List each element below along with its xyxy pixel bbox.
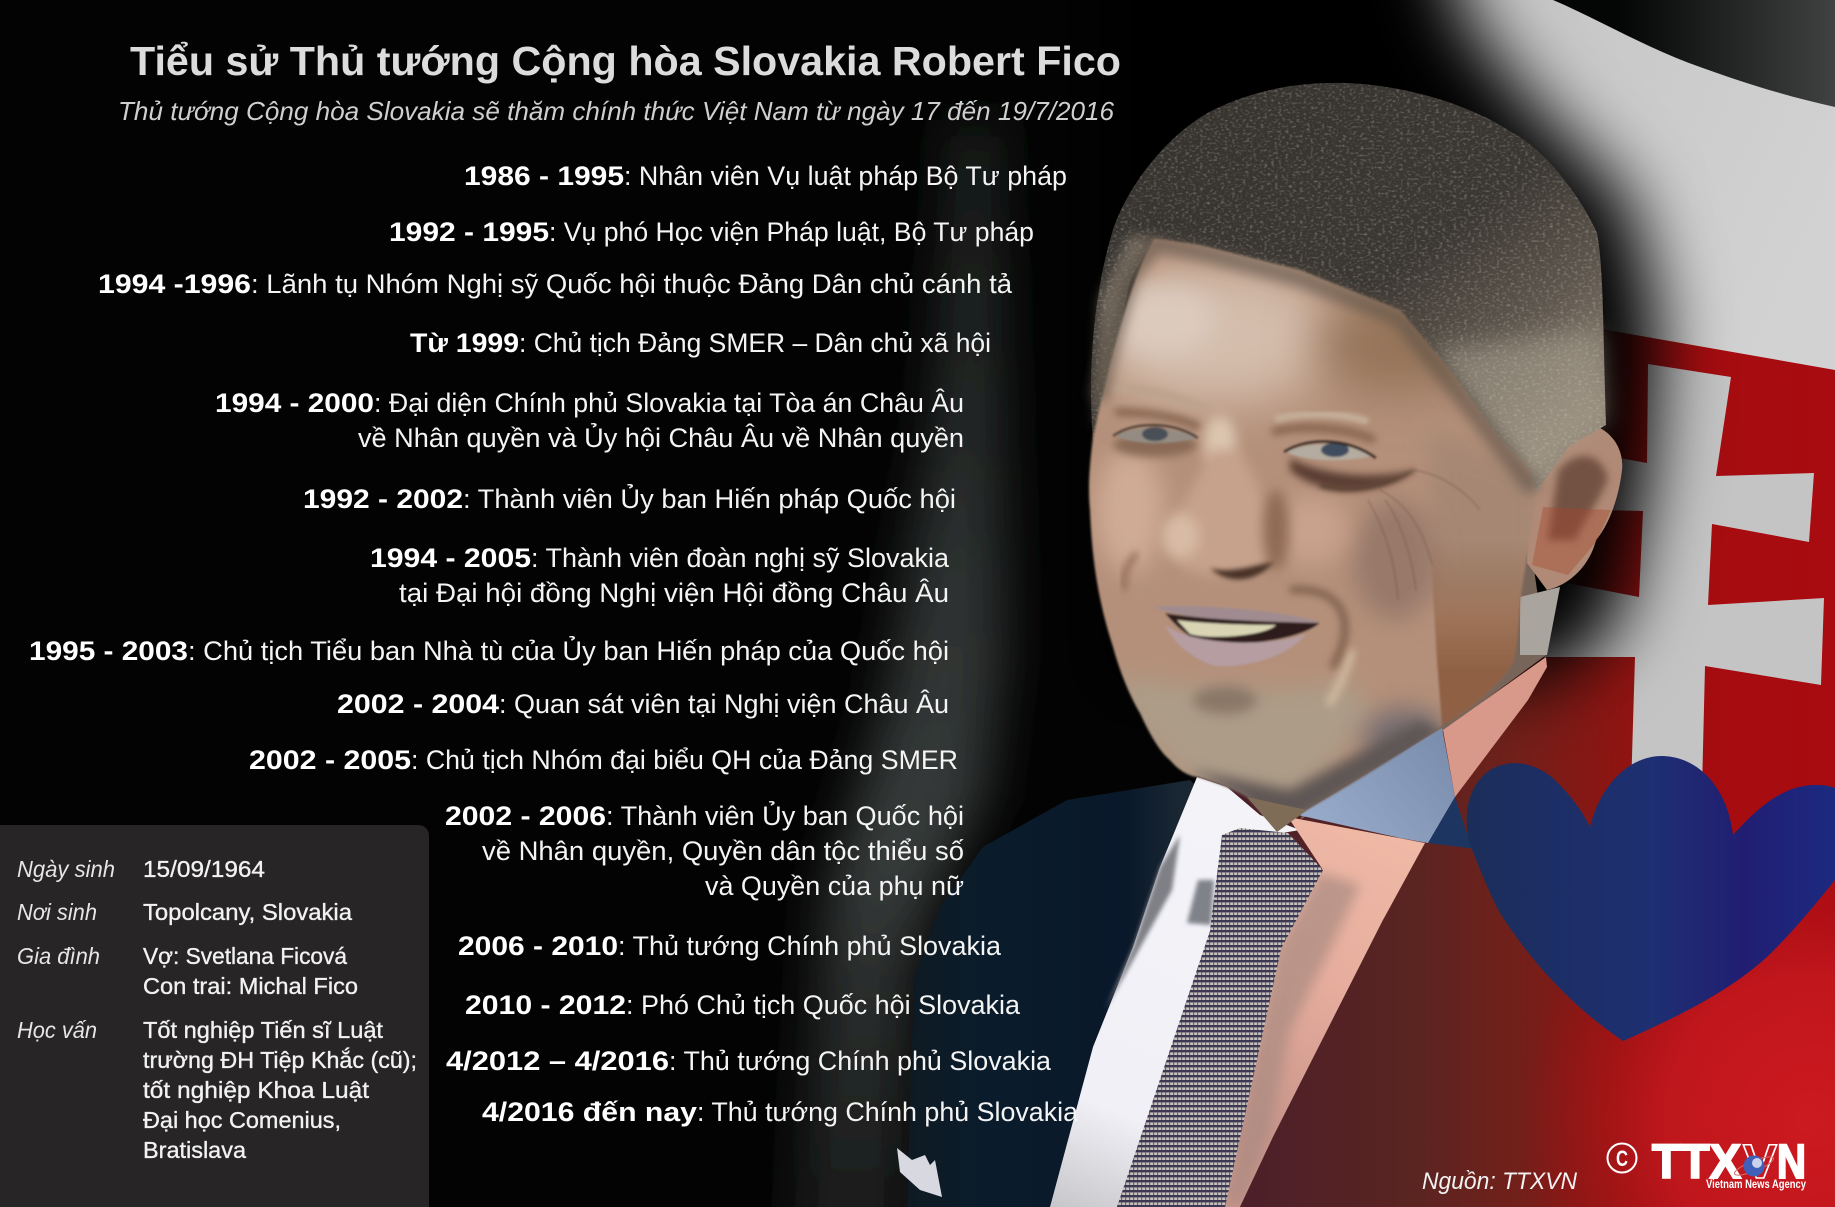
double cross (1500, 364, 1824, 790)
timeline: 2002-2006: : Thành viên Ủy ban Quốc hội (606, 799, 964, 831)
shirt shadow by tie (1226, 872, 1360, 1207)
timeline: 2002-2006: 2002 - 2006 (445, 801, 606, 831)
timeline: 1992-2002 (303, 482, 956, 514)
face (1089, 238, 1560, 830)
timeline: 1986-1995: : Nhân viên Vụ luật pháp Bộ Tư pháp (624, 161, 1067, 191)
hair texture (1090, 80, 1610, 510)
timeline: 1994-2000: 1994 - 2000 (215, 388, 374, 418)
timeline: 2006-2010: 2006 - 2010 (458, 931, 618, 961)
timeline: 4/2016 to present: 4/2016 đến nay (482, 1097, 697, 1127)
family row: Gia đình (17, 943, 100, 969)
smile highlight (1328, 650, 1352, 705)
panel: personal information (0, 825, 429, 1207)
timeline: 2006-2010: : Thủ tướng Chính phủ Slovakia (618, 931, 1002, 961)
hair temple tone (1095, 235, 1160, 430)
cheek overlay tone (1432, 560, 1524, 726)
family row: Vợ: Svetlana Ficová (143, 943, 347, 969)
education row: trường ĐH Tiệp Khắc (cũ); (143, 1047, 417, 1073)
timeline: 2002-2005: 2002 - 2005 (249, 745, 411, 775)
hairline softening (1098, 243, 1535, 490)
icon: blue heart shield (1467, 756, 1835, 1041)
subtitle: Thủ tướng Cộng hòa Slovakia sẽ thăm chính thức Việt Nam từ ngày 17 đến 19/7/2016 (118, 96, 1115, 126)
shirt (1050, 777, 1300, 1207)
timeline: 2010-2012: 2010 - 2012 (465, 990, 626, 1020)
logo tagline: Vietnam News Agency (1706, 1177, 1806, 1191)
logo globe (1733, 1153, 1775, 1179)
timeline: 1994-2005: 1994 - 2005 (370, 543, 531, 573)
suit jacket (907, 780, 1200, 1207)
timeline: 2002-2004: : Quan sát viên tại Nghị viện Châu Âu (499, 688, 949, 719)
flag red field (1200, 310, 1835, 1207)
brow shadows (1115, 412, 1375, 440)
logo wordmark: TTX (1652, 1136, 1741, 1189)
panel: portrait of Robert Fico (897, 80, 1622, 1207)
lower face stubble tone (1128, 683, 1363, 786)
timeline: 1994-1996: : Lãnh tụ Nhóm Nghị sỹ Quốc hội thuộc Đảng Dân chủ cánh tả (251, 269, 1013, 299)
birth place row (17, 899, 352, 925)
timeline: 1994-1996: 1994 -1996 (98, 269, 251, 299)
birth date row: 15/09/1964 (143, 856, 265, 882)
shirt fold shadow (1187, 880, 1214, 925)
timeline: 1994-2000 (215, 387, 964, 453)
right eye (1284, 441, 1414, 490)
flag red glow on suit (1500, 800, 1835, 1207)
smile lines (1290, 590, 1345, 668)
timeline: 2002-2006: và Quyền của phụ nữ (705, 871, 964, 901)
timeline: 2010-2012: : Phó Chủ tịch Quốc hội Slovakia (626, 990, 1021, 1020)
nose (1163, 450, 1289, 579)
timeline: 1986-1995: 1986 - 1995 (464, 161, 624, 191)
logo wordmark (1652, 1136, 1806, 1189)
education row: Bratislava (143, 1137, 246, 1163)
timeline: 4/2012-4/2016: 4/2012 – 4/2016 (446, 1046, 669, 1076)
timeline: 1994-2005 (370, 543, 950, 608)
timeline: 1992-2002: : Thành viên Ủy ban Hiến pháp Quốc hội (463, 482, 956, 514)
nose bridge highlight (1204, 416, 1236, 468)
left eye (1113, 425, 1198, 457)
panel: flag overlay over the suit (1240, 820, 1835, 1207)
birth place row: Nơi sinh (17, 899, 97, 925)
ear red tint (1532, 507, 1611, 575)
hair grey side (1430, 330, 1606, 495)
timeline: 2002-2005: : Chủ tịch Nhóm đại biểu QH của Đảng SMER (411, 745, 958, 775)
head shadow halo (1100, 0, 1660, 700)
timeline: 4/2016 to present: : Thủ tướng Chính phủ Slovakia (697, 1097, 1079, 1127)
timeline: 1994-2000: về Nhân quyền và Ủy hội Châu Âu về Nhân quyền (358, 421, 964, 453)
birth place row: Topolcany, Slovakia (143, 899, 352, 925)
timeline: 2002-2004: 2002 - 2004 (337, 689, 499, 719)
timeline: 2002-2006 (445, 799, 964, 901)
timeline: 1994-2005: : Thành viên đoàn nghị sỹ Slovakia (531, 543, 950, 573)
timeline: 1992-1995: 1992 - 1995 (389, 217, 549, 247)
timeline: 2002-2006: về Nhân quyền, Quyền dân tộc thiểu số (482, 836, 964, 866)
neck (1300, 540, 1546, 820)
timeline: 1992-2002: 1992 - 2002 (303, 484, 463, 514)
timeline: from 1999: : Chủ tịch Đảng SMER – Dân chủ xã hội (519, 328, 991, 358)
crow's feet wrinkles (1368, 470, 1480, 600)
timeline: 4/2012-4/2016 (446, 1046, 1052, 1076)
necktie knot (1210, 828, 1323, 947)
timeline: 4/2016 to present (482, 1097, 1079, 1127)
logo wordmark: V (1743, 1136, 1777, 1189)
background haze (790, 120, 1005, 1207)
copyright mark (1608, 1144, 1636, 1172)
pocket square (897, 1148, 942, 1197)
collar blue tint (1298, 728, 1455, 843)
education row: Tốt nghiệp Tiến sĩ Luật (143, 1017, 384, 1043)
timeline: 1995-2003: 1995 - 2003 (29, 636, 188, 666)
copyright mark: C (1616, 1146, 1628, 1171)
ear inner shadow (1548, 456, 1608, 540)
mouth (1153, 606, 1320, 666)
panel: Slovak flag (1100, 0, 1835, 1207)
source note: Nguồn: TTXVN (1422, 1168, 1578, 1195)
flag red glow (1500, 800, 1835, 1207)
flag top dark corner (1553, 0, 1835, 107)
timeline: 4/2012-4/2016: : Thủ tướng Chính phủ Slovakia (669, 1046, 1052, 1076)
neck light patch (1520, 587, 1560, 655)
title: Tiểu sử Thủ tướng Cộng hòa Slovakia Robert Fico (130, 38, 1121, 84)
family row (17, 943, 358, 999)
birth date row: Ngày sinh (17, 856, 115, 882)
education row: Học vấn (17, 1017, 97, 1043)
education row (17, 1017, 417, 1163)
birth date row (17, 856, 265, 882)
timeline: 1994-2000: : Đại diện Chính phủ Slovakia tại Tòa án Châu Âu (374, 387, 964, 418)
education row: Đại học Comenius, (143, 1107, 341, 1133)
timeline: from 1999: Từ 1999 (410, 328, 519, 358)
collar navy sliver (1428, 797, 1473, 852)
chin stubble wedge (1247, 797, 1307, 832)
logo: TTXVN (1608, 1136, 1806, 1191)
flag white band (1230, 0, 1835, 372)
necktie blade (1117, 925, 1282, 1207)
timeline: 1995-2003: : Chủ tịch Tiểu ban Nhà tù của Ủy ban Hiến pháp của Quốc hội (188, 634, 949, 666)
shirt lapel shadow (1105, 835, 1180, 1010)
timeline: 1992-1995: : Vụ phó Học viện Pháp luật, Bộ Tư pháp (549, 217, 1034, 247)
salmon collar wedge (1443, 657, 1547, 797)
eyebrows (1156, 390, 1176, 396)
pink shirt under flag overlay (1225, 817, 1425, 1207)
ear (1527, 423, 1622, 590)
family row: Con trai: Michal Fico (143, 973, 358, 999)
face shading (1090, 265, 1560, 830)
timeline: 1994-2005: tại Đại hội đồng Nghị viện Hội đồng Châu Âu (399, 577, 949, 608)
hair (1090, 80, 1610, 510)
education row: tốt nghiệp Khoa Luật (143, 1077, 370, 1103)
logo wordmark: N (1777, 1136, 1806, 1189)
